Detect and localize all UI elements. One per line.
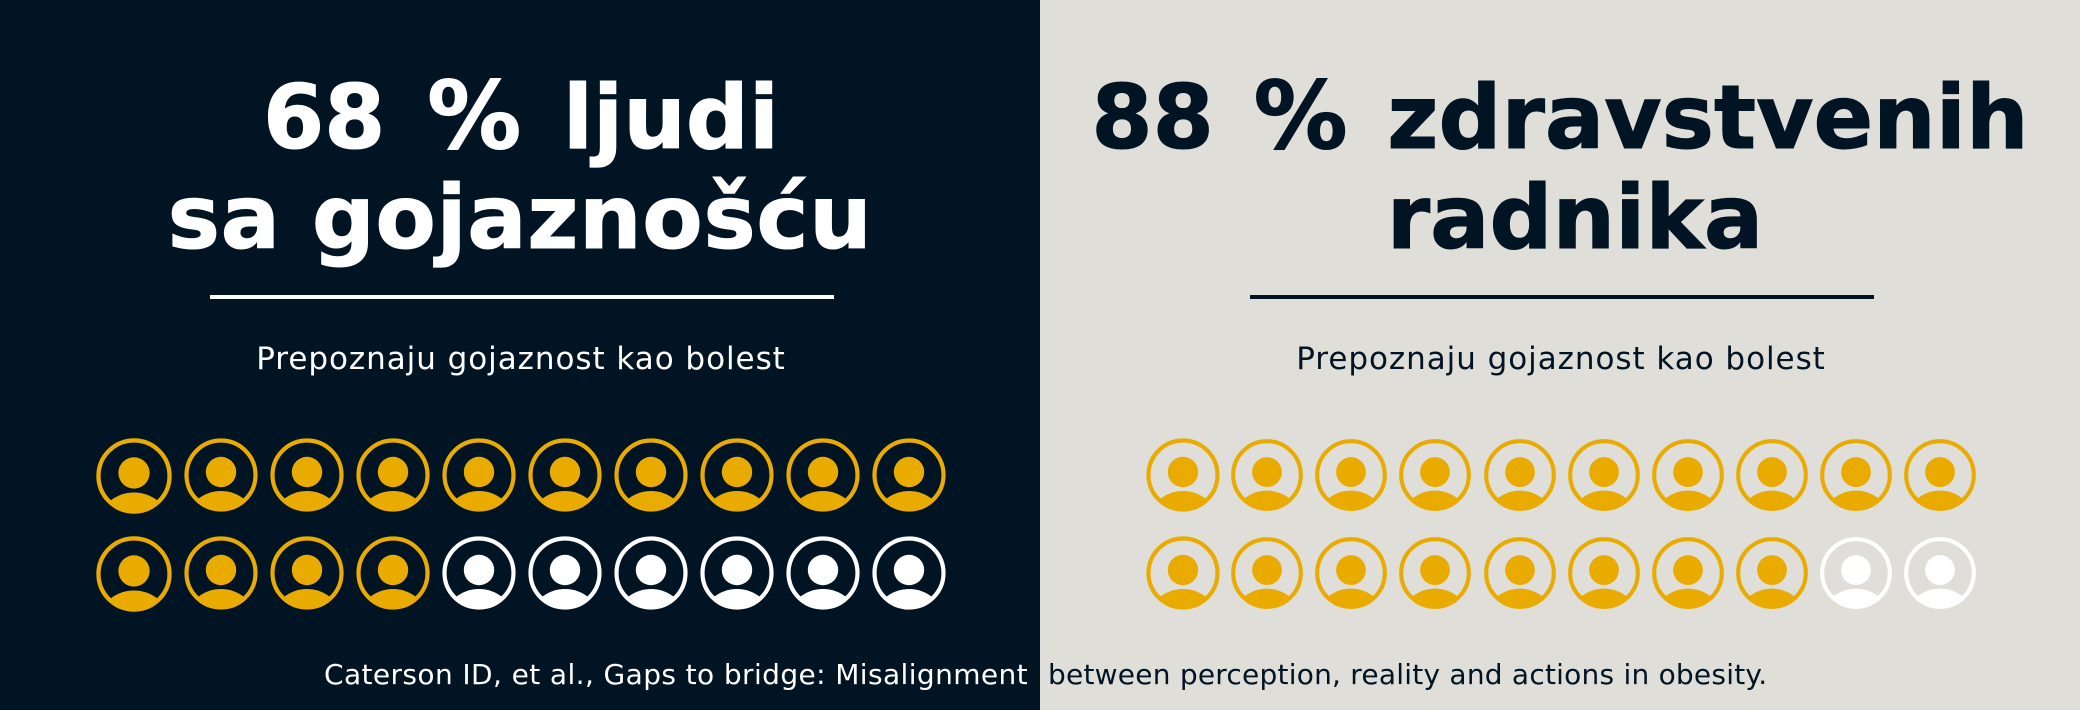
- text: source citation, left part: Caterson ID, et al., Gaps to bridge: Misalignment: [324, 658, 1028, 691]
- heading: 88 % zdravstvenih radnika: radnika: [1387, 166, 1763, 269]
- heading: 88 % zdravstvenih radnika: [1091, 62, 2029, 269]
- heading: 68 % ljudi sa gojaznošću: sa gojaznošću: [168, 166, 872, 269]
- heading: 88 % zdravstvenih radnika: 88 % zdravstvenih: [1091, 62, 2029, 171]
- panel: right light background: [1040, 0, 2080, 710]
- text: left subtitle: Prepoznaju gojaznost kao bolest: [256, 341, 786, 377]
- heading: 68 % ljudi sa gojaznošću: [168, 62, 872, 269]
- icons: right people row 1: [1148, 440, 1974, 512]
- heading: 68 % ljudi sa gojaznošću: 68 % ljudi: [263, 62, 779, 171]
- panel: left dark background: [0, 0, 1040, 710]
- text: source citation, right part: between perception, reality and actions in obesity.: [1048, 658, 1767, 691]
- text: right subtitle: Prepoznaju gojaznost kao bolest: [1296, 341, 1826, 377]
- icons: left people row 1: [98, 440, 943, 514]
- icons: left people row 2: [98, 538, 943, 612]
- icons: right people row 2: [1148, 538, 1974, 610]
